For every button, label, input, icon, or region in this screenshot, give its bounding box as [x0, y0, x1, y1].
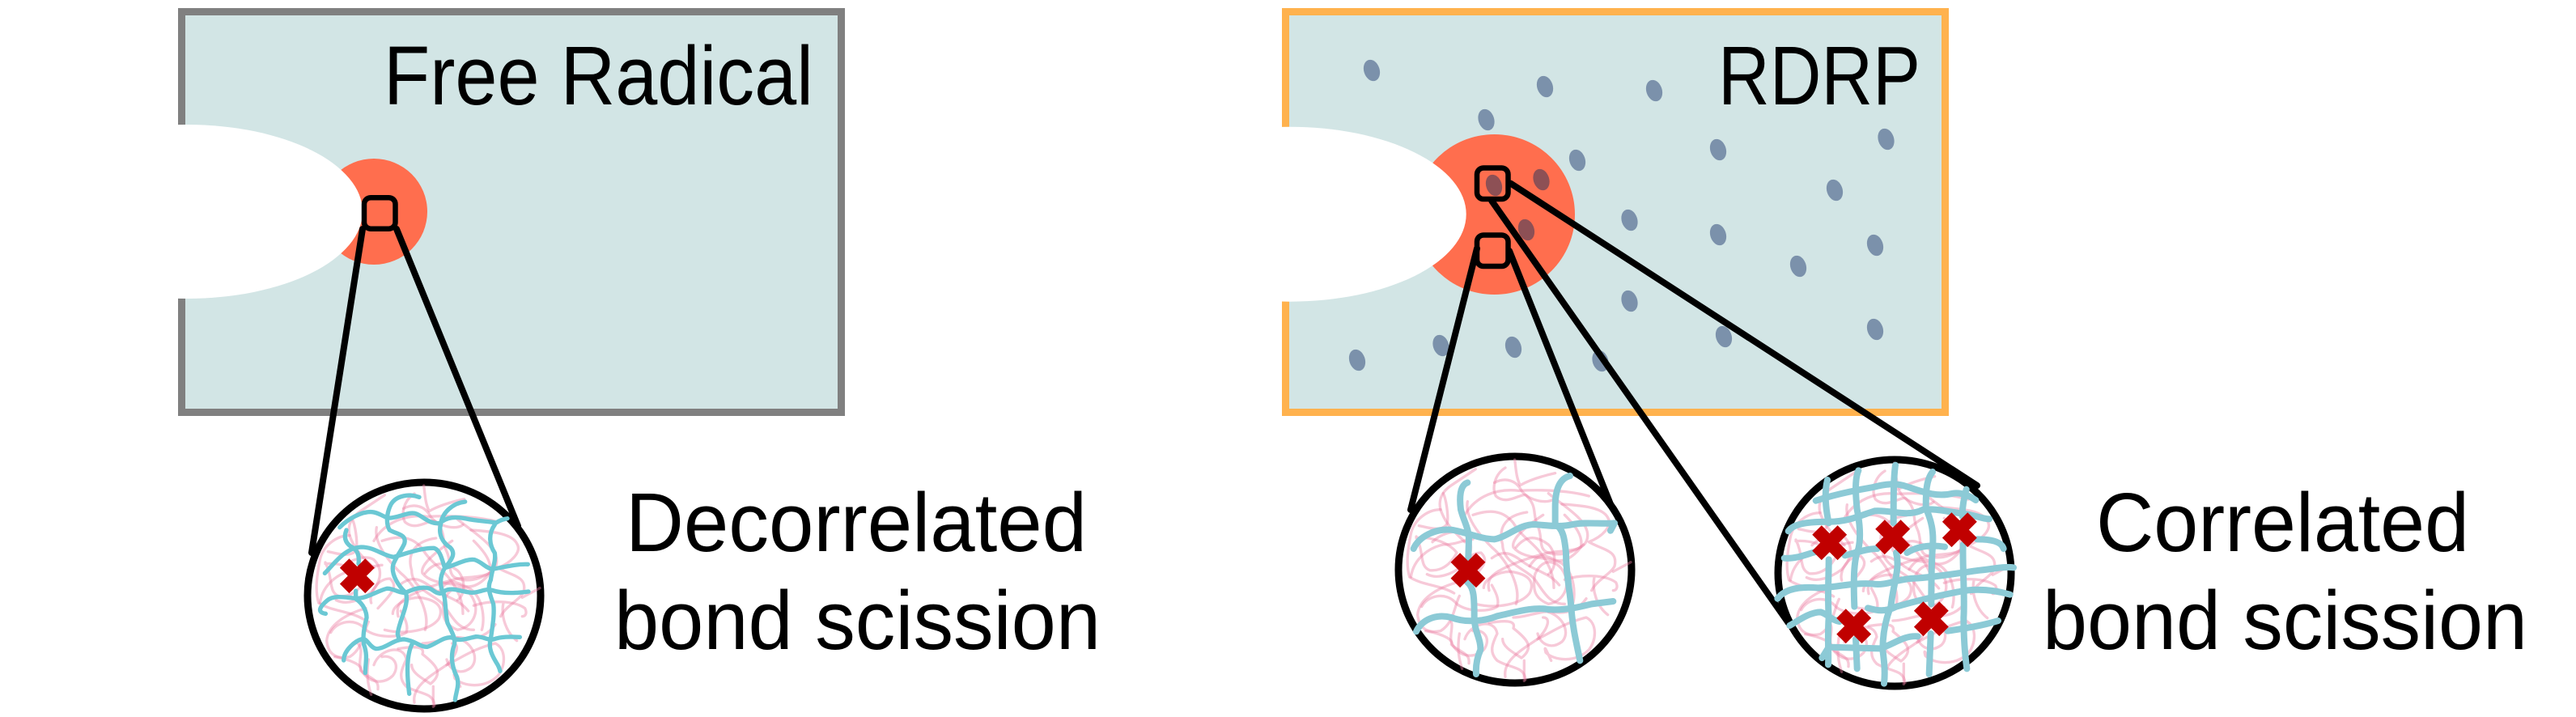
process zone: large orange ellipse [1414, 134, 1575, 295]
pink polymer tangle [1407, 460, 1631, 681]
label: Decorrelated bond scission [614, 476, 1101, 667]
scission mark [345, 563, 370, 588]
zoom line right [397, 229, 518, 526]
heading: RDRP: RDRP [1718, 29, 1920, 122]
pink polymer tangle [316, 486, 540, 706]
circle outline [1778, 460, 2011, 686]
inset callout: free radical zoom lines and box [312, 197, 518, 553]
zoom line: upper box right [1511, 184, 1977, 486]
magnified network: RDRP high density [1777, 460, 2014, 686]
zoom line: lower box right [1509, 251, 1611, 504]
zoom line left [312, 229, 363, 553]
label: Correlated bond scission [2043, 476, 2527, 667]
magnified network: decorrelated [308, 482, 541, 709]
nanodomains inside process zone [1483, 167, 1552, 243]
scission mark [1455, 558, 1481, 583]
cyan crosslink strands [320, 495, 528, 700]
panel: Free Radical [11, 11, 842, 413]
scission marks [1817, 517, 1972, 639]
label line 1: Correlated [2096, 476, 2469, 569]
zoom box upper [1477, 168, 1509, 199]
blue nanodomains [1347, 57, 1897, 374]
heading: Free Radical: Free Radical [384, 29, 813, 122]
magnified network: RDRP low density [1398, 456, 1632, 683]
label line 1: Decorrelated [626, 476, 1087, 569]
panel background: RDRP material [1285, 11, 1946, 413]
crack: white notch [1114, 127, 1466, 302]
blue crosslink strands [1414, 476, 1615, 674]
circle outline [308, 482, 541, 709]
zoom line: lower box left [1411, 248, 1477, 510]
zoom box lower [1477, 235, 1509, 266]
panel: RDRP [1114, 11, 1946, 413]
blue crosslink strands [1777, 465, 2014, 684]
zoom box [364, 197, 395, 229]
panel background: free radical material [181, 11, 842, 413]
inset callouts: RDRP zoom lines and boxes [1411, 168, 1977, 623]
label line 2: bond scission [2043, 574, 2527, 667]
label line 2: bond scission [614, 574, 1101, 667]
zoom line: upper box left [1492, 201, 1789, 623]
crack: white notch [11, 125, 363, 299]
process zone: small orange ellipse [320, 159, 427, 265]
pink polymer tangle [1787, 463, 2010, 684]
circle outline [1398, 456, 1632, 683]
